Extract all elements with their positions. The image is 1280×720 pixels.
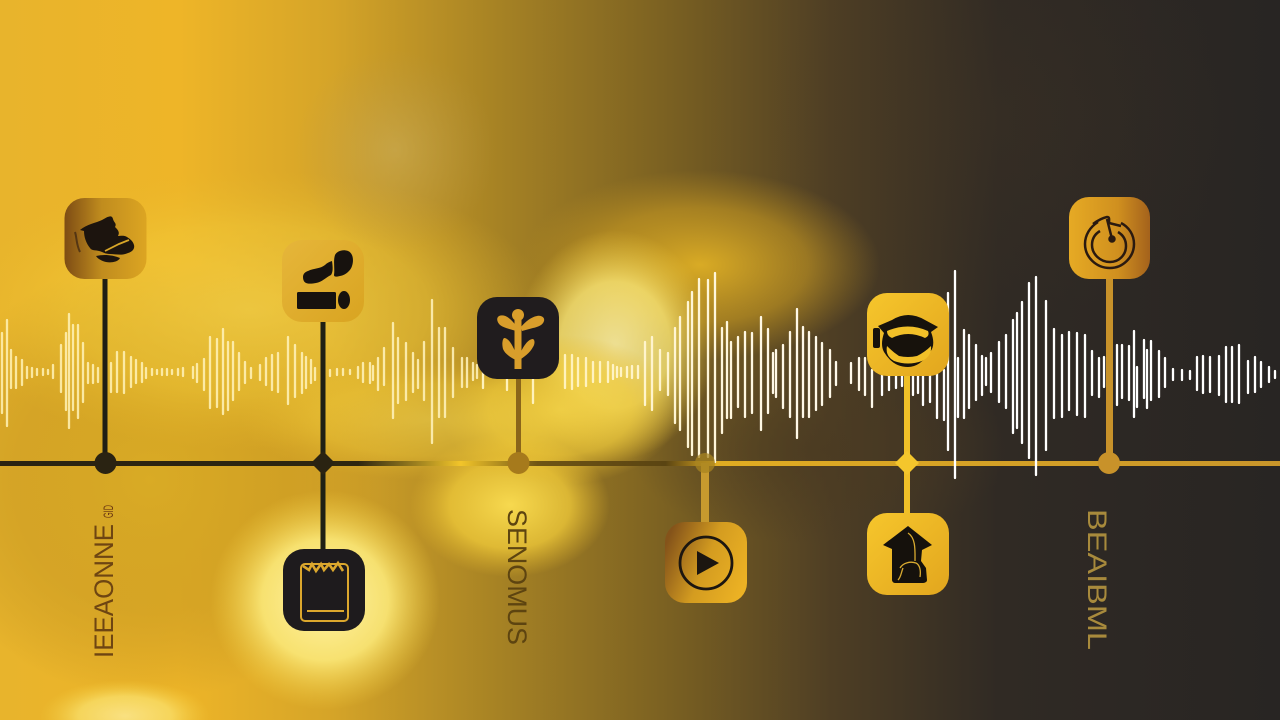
icon: dark leaves: [75, 216, 134, 262]
card: notepad icon: [283, 549, 365, 631]
card: mask and cap icon: [867, 293, 949, 376]
card: leaf cluster icon: [64, 198, 146, 279]
audio waveform: [2, 271, 1275, 478]
vertical label: first: IEEAONNE: [89, 524, 119, 658]
icon: play button: [680, 537, 732, 589]
stem: sensor one: [102, 276, 108, 463]
vertical label: second: SENOMUS: [502, 509, 532, 645]
card: circular target icon: [1069, 197, 1150, 279]
stem: sensor five, up and down: [904, 374, 910, 516]
card: arm and keyboard icon: [282, 240, 364, 322]
timeline axis: [0, 461, 1280, 466]
icon: gold notepad: [301, 563, 348, 621]
icon: graduation mask: [873, 315, 938, 367]
icon: gold plant: [497, 309, 544, 369]
card: play icon: [665, 522, 747, 603]
icon: house shape: [883, 526, 932, 583]
stem: play: [701, 463, 709, 525]
stem: sensor six: [1106, 276, 1113, 463]
icon: spiral target: [1085, 217, 1134, 268]
vertical label: first, small suffix: GID: [100, 505, 116, 518]
stem: sensor two, up and down: [320, 320, 326, 552]
node markers: [94, 451, 1120, 475]
stem: sensor three: [516, 376, 521, 463]
vertical label: third: BEAIBML: [1082, 509, 1112, 650]
card: plant icon: [477, 297, 559, 379]
card: house and backpack icon: [867, 513, 949, 595]
icon: arm and device: [297, 250, 353, 309]
